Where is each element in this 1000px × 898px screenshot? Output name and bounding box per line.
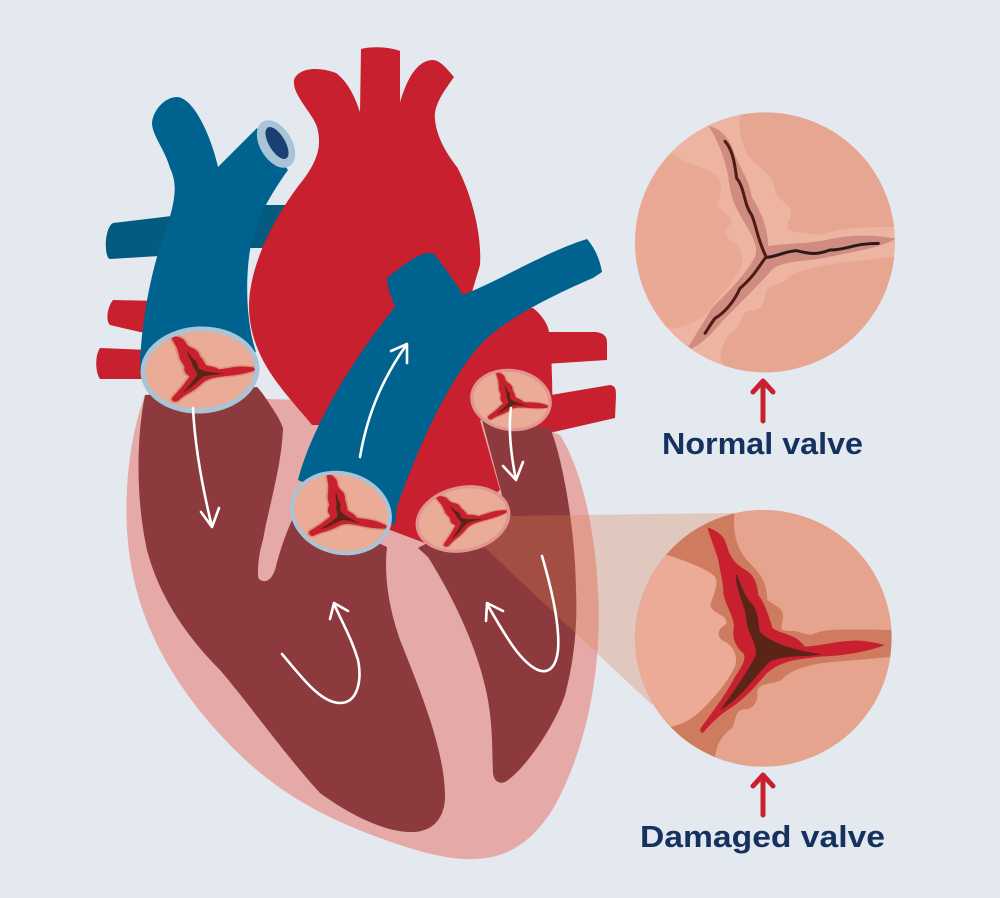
flow arrows [193, 344, 558, 703]
valve 3: blue ring [284, 463, 398, 563]
superior vena cava [140, 97, 288, 372]
arrow: to damaged valve [753, 775, 773, 815]
valve 1: blue ring [142, 327, 258, 413]
damaged valve art [620, 500, 897, 773]
panel: damaged valve [620, 500, 897, 773]
pulmonary artery [298, 239, 602, 525]
chamber: right side [138, 387, 445, 832]
left atrium red [350, 308, 552, 545]
label: normal valve: Normal valve [662, 426, 863, 461]
vessels: left red stubs [96, 300, 160, 379]
heart outer wall [126, 395, 599, 859]
chamber: left side [418, 420, 576, 783]
vessels: right red stubs [545, 332, 616, 434]
arrow: to normal valve [753, 381, 773, 421]
panel: normal valve [635, 112, 895, 372]
normal valve crack [705, 141, 878, 333]
label: damaged valve: Damaged valve [640, 819, 885, 854]
aorta [249, 47, 480, 425]
valve 2: upper right [468, 366, 554, 434]
vessel: back pulmonary vein [106, 205, 295, 259]
zoom cone [482, 513, 735, 705]
valve 4: lower right [412, 479, 514, 559]
normal valve dark band [688, 126, 896, 349]
vessel opening [249, 113, 303, 175]
heart illustration [96, 47, 735, 859]
